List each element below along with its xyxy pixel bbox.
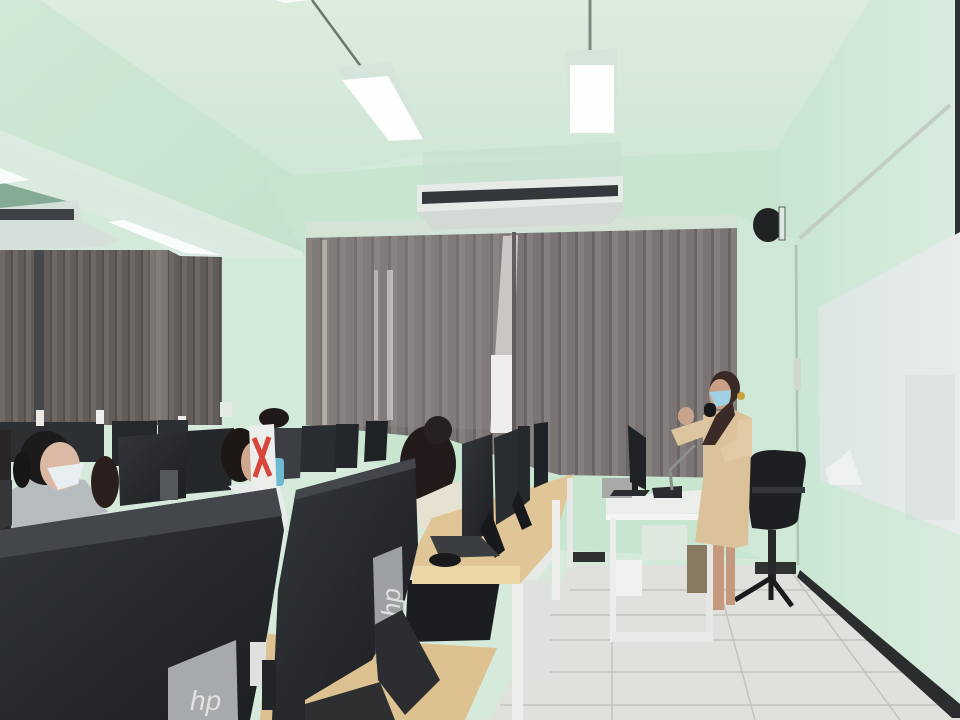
second desk row student — [400, 416, 500, 642]
centre ceiling light — [275, 0, 426, 142]
hp logo on right monitor: hp — [376, 588, 406, 617]
right ceiling light — [565, 0, 617, 134]
second row monitors — [429, 422, 548, 567]
teacher's monitor and microphone — [610, 425, 695, 498]
whiteboard — [818, 232, 960, 535]
second row desk — [412, 474, 574, 720]
pillar right of blinds — [738, 216, 797, 565]
back wall — [220, 150, 775, 560]
wall speaker — [753, 207, 785, 242]
foreground desk — [260, 634, 497, 720]
left wall air conditioner — [0, 200, 122, 250]
floor — [490, 552, 960, 720]
right wall — [775, 0, 960, 700]
main vertical blinds — [306, 215, 737, 478]
back row students and monitors — [0, 408, 388, 480]
foreground left monitor — [0, 488, 284, 720]
left wall — [0, 0, 305, 258]
foreground right monitor — [272, 458, 440, 720]
hp logo on left monitor: hp — [190, 685, 221, 716]
wall conduit and trim — [220, 0, 960, 565]
sign with red X — [249, 424, 277, 501]
office chair — [735, 450, 806, 606]
teacher — [671, 371, 752, 610]
student with mask — [0, 430, 108, 530]
middle row monitors and student — [91, 428, 288, 560]
ceiling air conditioner — [417, 142, 623, 230]
teacher's desk — [602, 478, 716, 642]
left alcove with blinds — [0, 130, 305, 430]
left ceiling light — [0, 168, 224, 257]
